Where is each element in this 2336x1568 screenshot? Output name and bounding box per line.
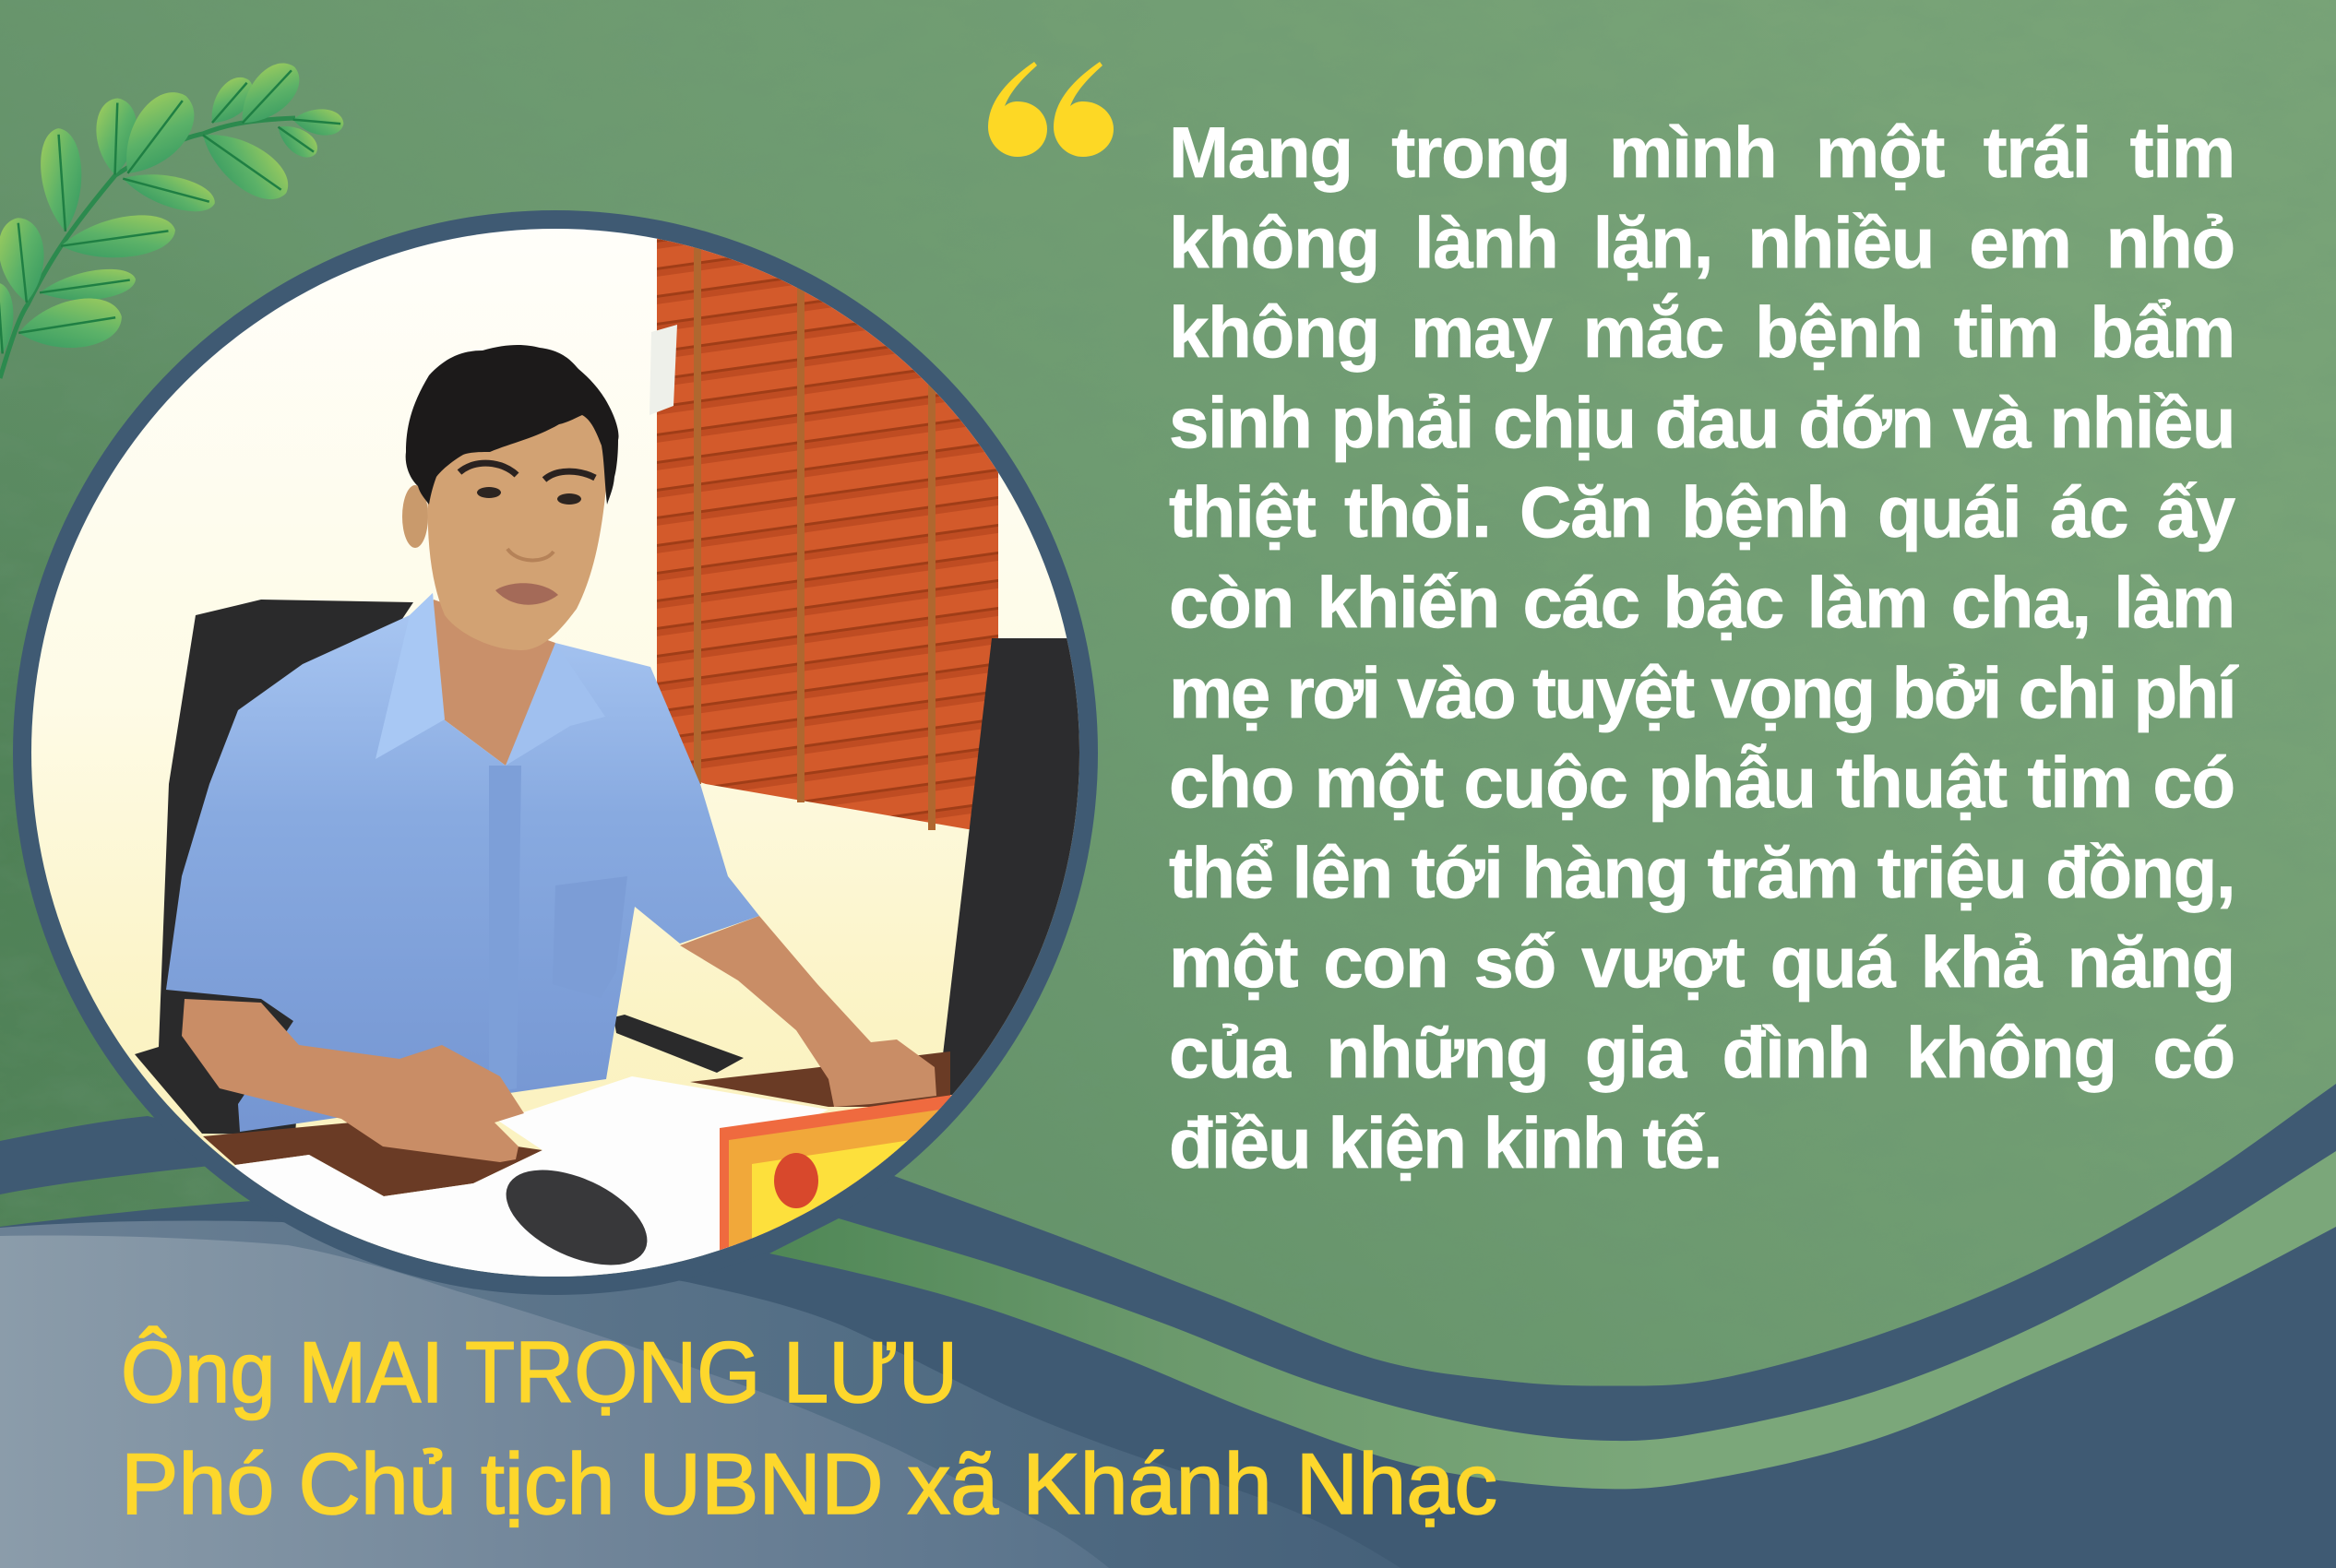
photo: man at office desk xyxy=(0,221,1107,1310)
quote text block: còn khiến các bậc làm cha, làm xyxy=(1169,562,2235,643)
quote text block: không may mắc bệnh tim bẩm xyxy=(1169,291,2235,373)
panel: gray footer, inner tier xyxy=(0,1235,1109,1568)
photo paper on desk xyxy=(234,1076,828,1277)
quote text block xyxy=(1169,112,2239,1183)
quote text block: cho một cuộc phẫu thuật tim có xyxy=(1169,742,2235,823)
quote text block: điều kiện kinh tế. xyxy=(1169,1102,1722,1183)
quote text block: của những gia đình không có xyxy=(1169,1012,2235,1093)
photo window blinds xyxy=(650,221,998,832)
quote text block: một con số vượt quá khả năng xyxy=(1169,921,2235,1003)
quote text block: mẹ rơi vào tuyệt vọng bởi chi phí xyxy=(1169,652,2235,733)
photo wall xyxy=(0,221,1107,1291)
decoration: green leaf sprig xyxy=(0,53,345,378)
quote text block: không lành lặn, nhiều em nhỏ xyxy=(1169,202,2235,283)
quote text block: thể lên tới hàng trăm triệu đồng, xyxy=(1169,832,2235,913)
quote text block: Mang trong mình một trái tim xyxy=(1169,112,2235,193)
photo neck xyxy=(434,600,555,766)
photo office chair xyxy=(135,600,744,1134)
speaker title: Phó Chủ tịch UBND xã Khánh Nhạc xyxy=(121,1435,1497,1532)
speaker name and title xyxy=(121,1324,1497,1532)
portrait ring xyxy=(13,210,1098,1295)
photo arms and hands xyxy=(182,916,936,1162)
wave: light green band xyxy=(769,1151,2336,1489)
photo name plate xyxy=(720,1094,959,1291)
photo blue shirt xyxy=(166,593,759,1132)
icon: yellow quotation marks xyxy=(988,62,1114,157)
photo head xyxy=(402,345,619,650)
panel: gray footer, outer tier xyxy=(0,1220,1400,1568)
wave: navy base and ribbon xyxy=(0,1084,2336,1568)
speaker name: Ông MAI TRỌNG LƯU xyxy=(121,1324,958,1420)
quote text block: thiệt thòi. Căn bệnh quái ác ấy xyxy=(1169,471,2235,552)
quote text block: sinh phải chịu đau đớn và nhiều xyxy=(1169,382,2235,463)
photo desk xyxy=(203,1051,950,1196)
photo monitor xyxy=(943,638,1079,1096)
photo computer mouse xyxy=(506,1170,648,1265)
